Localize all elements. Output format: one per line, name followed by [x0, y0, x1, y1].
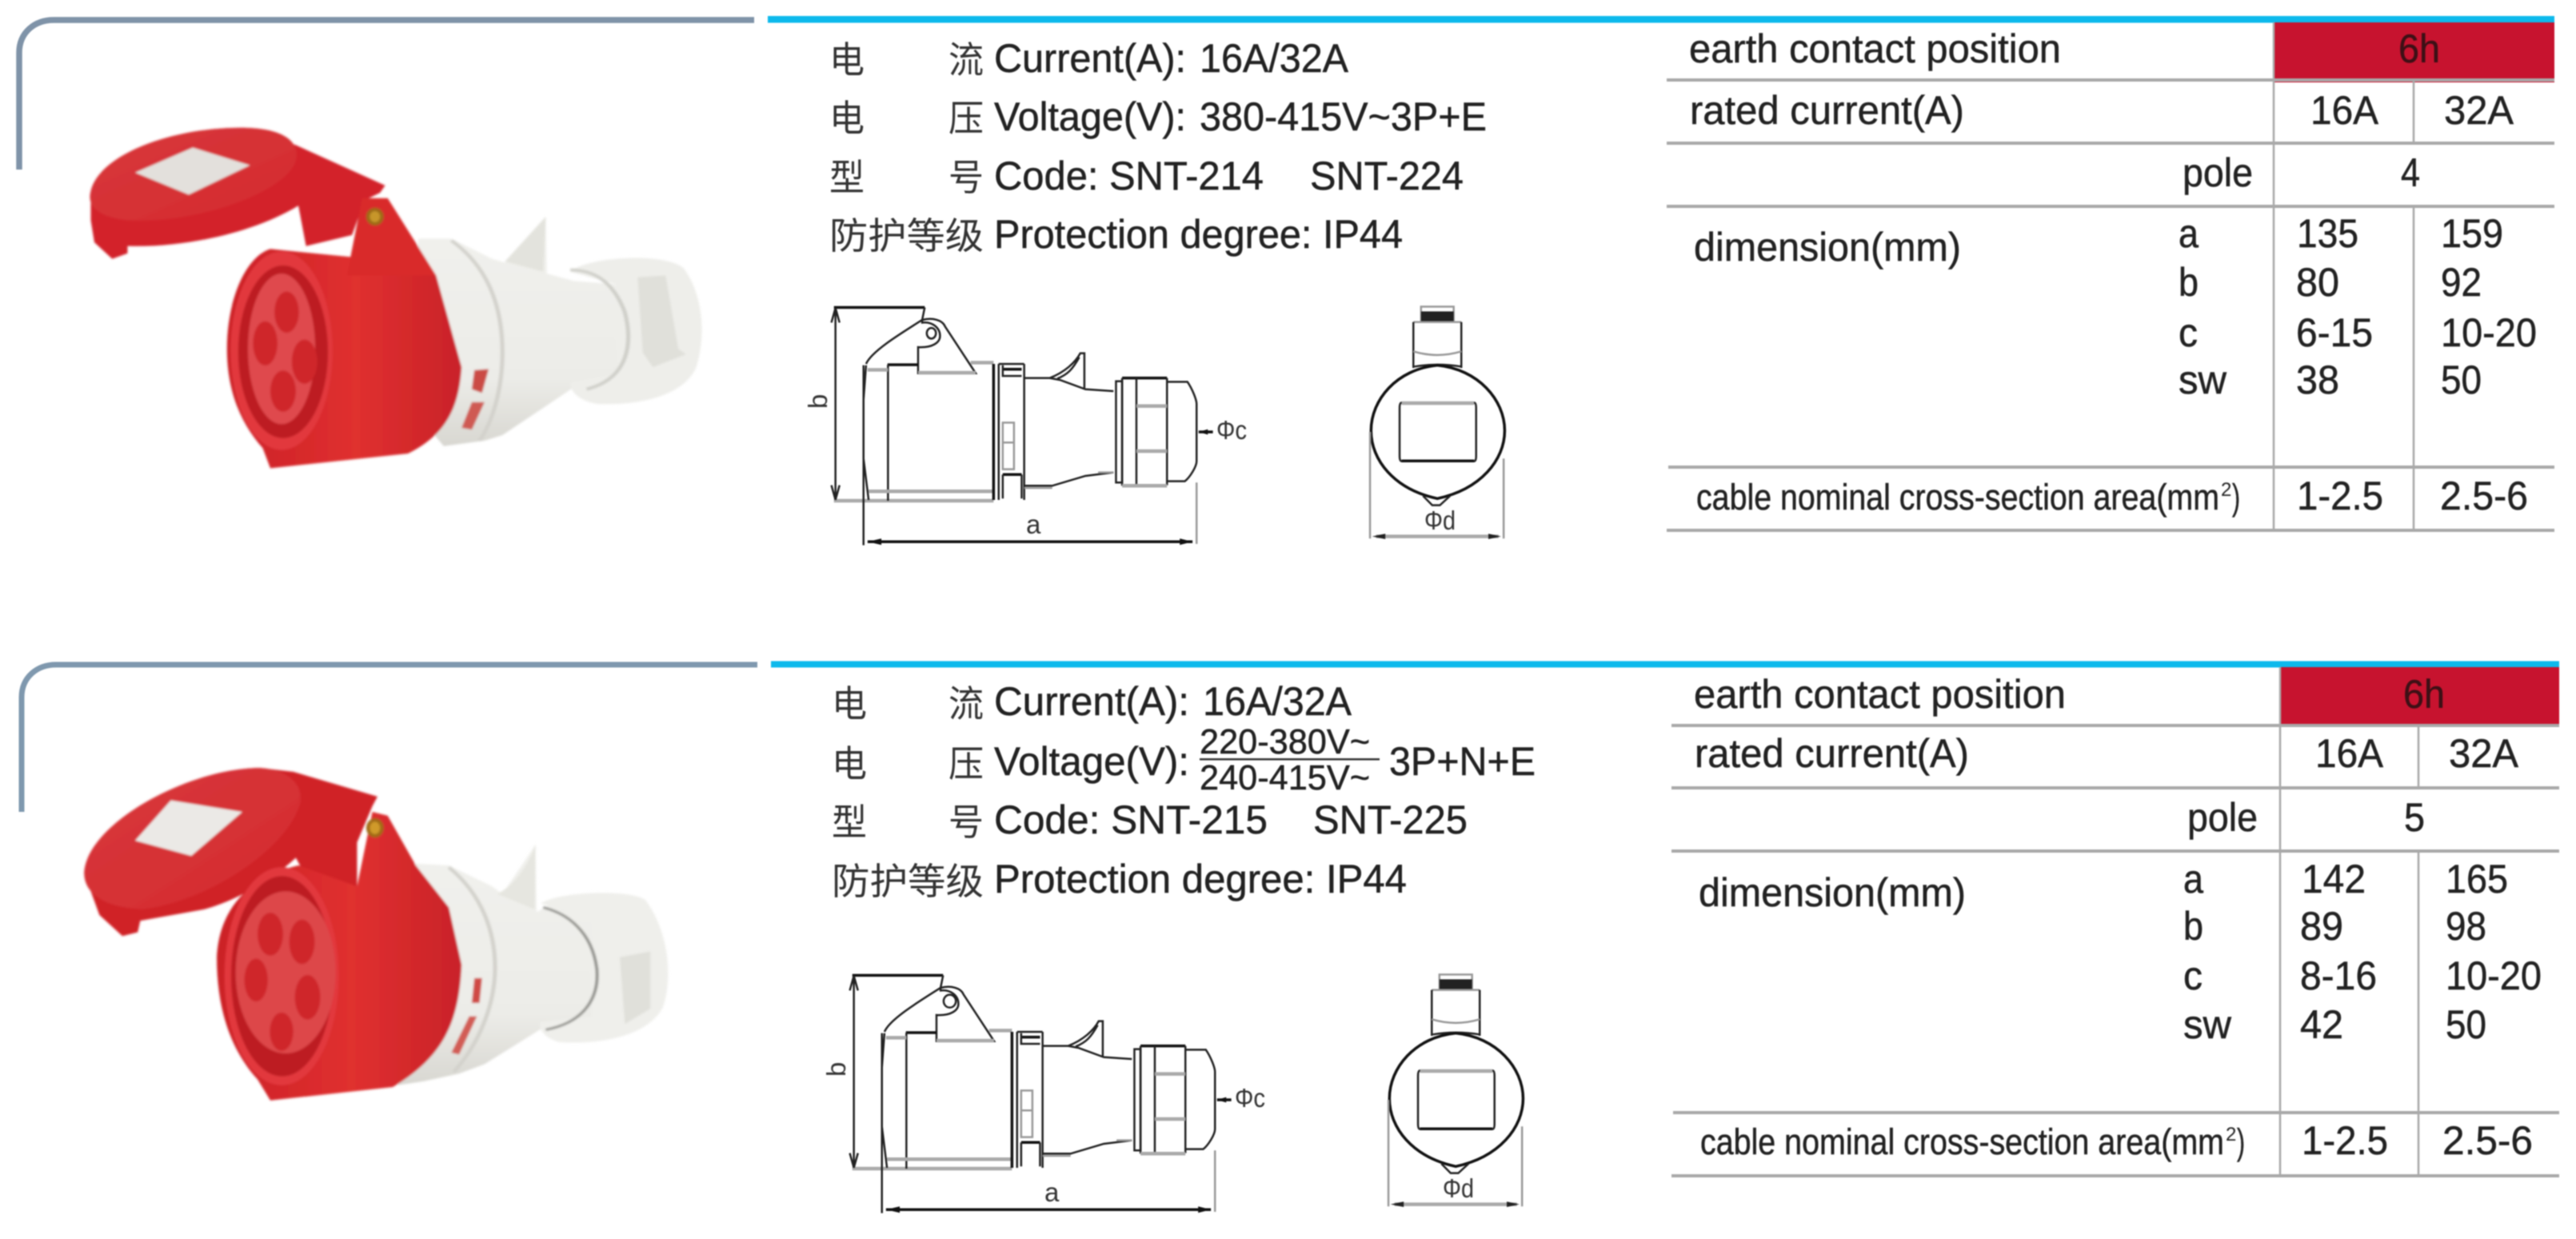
technical drawing: 5-pole side and front views	[821, 974, 1523, 1213]
specification table: 4-pole: 32A	[2444, 88, 2514, 133]
specification table: 4-pole: )	[2232, 477, 2240, 518]
specification text: 5-pole: 压	[949, 735, 984, 788]
specification text: 4-pole: Voltage(V):	[994, 94, 1186, 139]
specification table: 4-pole: rated current(A)	[1690, 88, 1964, 133]
specification table: 4-pole: pole	[2183, 150, 2253, 195]
specification text: 5-pole	[832, 675, 1536, 905]
specification table: 4-pole: 80	[2296, 260, 2339, 305]
specification table: 5-pole: 50	[2446, 1002, 2486, 1047]
specification table: 5-pole: b	[2183, 904, 2203, 949]
specification table: 4-pole: a	[2179, 211, 2199, 256]
specification table: 4-pole: sw	[2179, 358, 2227, 402]
specification table: 5-pole: c	[2183, 953, 2203, 998]
specification text: 5-pole: 电	[832, 735, 867, 788]
specification table: 4-pole: 2.5-6	[2440, 474, 2528, 518]
specification text: 5-pole: 240-415V~	[1200, 758, 1370, 797]
header rule: blue, second section	[771, 661, 2559, 667]
specification text: 5-pole: 流	[949, 675, 984, 728]
specification text: 4-pole: 电	[829, 90, 865, 142]
specification table: 4-pole: 10-20	[2441, 310, 2537, 355]
specification text: 4-pole	[829, 31, 1487, 260]
technical drawing: 5-pole side and front views: Φd	[1443, 1173, 1474, 1203]
specification table: 4-pole: b	[2179, 260, 2199, 305]
section 1: 4-pole connector	[19, 16, 2554, 546]
specification text: 5-pole: 型	[832, 793, 867, 846]
specification table: 5-pole: rated current(A)	[1695, 731, 1969, 776]
technical drawing: 5-pole side and front views: Φc	[1235, 1083, 1265, 1113]
specification table: 4-pole: 6-15	[2296, 310, 2373, 355]
specification text: 4-pole: 16A/32A	[1200, 36, 1349, 81]
specification text: 5-pole: 号	[949, 793, 984, 846]
specification table: 5-pole: 8-16	[2300, 953, 2377, 998]
specification table: 5-pole: 89	[2300, 904, 2343, 949]
technical drawing: 4-pole side and front views: Φd	[1424, 506, 1456, 535]
section 2: 5-pole connector	[22, 661, 2559, 1213]
specification text: 5-pole: Voltage(V):	[994, 739, 1189, 784]
specification table: 5-pole	[1671, 667, 2559, 1176]
specification text: 4-pole: 号	[949, 149, 984, 202]
header rule: blue	[768, 16, 2554, 22]
specification table: 4-pole: earth contact position	[1689, 26, 2061, 71]
technical drawing: 4-pole side and front views	[803, 306, 1504, 546]
specification table: 5-pole: 16A	[2315, 731, 2384, 776]
specification text: 4-pole: 防护等级	[829, 207, 984, 260]
specification table: 4-pole: 92	[2441, 260, 2482, 305]
specification table: 4-pole: 1-2.5	[2297, 474, 2383, 518]
specification table: 5-pole: )	[2237, 1121, 2245, 1162]
specification table: 5-pole: 10-20	[2446, 953, 2542, 998]
specification table: 5-pole: earth contact position	[1694, 672, 2066, 717]
specification text: 4-pole: 电	[829, 31, 865, 84]
specification table: 5-pole: 42	[2300, 1002, 2343, 1047]
specification table: 5-pole: 98	[2446, 904, 2486, 949]
specification table: 4-pole: 50	[2441, 358, 2482, 402]
specification table: 5-pole: 2	[2226, 1124, 2236, 1145]
specification table: 4-pole	[1667, 22, 2554, 530]
specification text: 5-pole: Code: SNT-215	[994, 797, 1268, 842]
technical drawing: 4-pole side and front views: a	[1026, 510, 1041, 539]
technical drawing: 5-pole side and front views: b	[821, 1062, 851, 1077]
technical drawing: 4-pole side and front views: Φc	[1216, 415, 1247, 445]
specification table: 5-pole: 5	[2404, 795, 2425, 840]
specification table: 4-pole: c	[2179, 310, 2198, 355]
specification table: 4-pole: 38	[2296, 358, 2339, 402]
specification table: 4-pole: 135	[2297, 211, 2358, 256]
specification text: 4-pole: 380-415V~3P+E	[1200, 94, 1487, 139]
specification text: 4-pole: Code: SNT-214	[994, 154, 1264, 198]
product photo: 5-pole red connector	[84, 768, 668, 1101]
technical drawing: 5-pole side and front views: a	[1044, 1177, 1060, 1207]
table highlight cell: 6h, second section	[2280, 667, 2559, 725]
specification table: 4-pole: 6h	[2398, 26, 2440, 71]
header rule: grey corner	[19, 20, 754, 170]
specification table: 5-pole: 1-2.5	[2302, 1118, 2388, 1163]
specification text: 5-pole: 220-380V~	[1200, 722, 1370, 761]
specification table: 5-pole: 142	[2302, 857, 2366, 901]
specification table: 4-pole: 4	[2401, 150, 2420, 195]
specification text: 5-pole: Current(A):	[994, 679, 1189, 724]
specification table: 5-pole: sw	[2183, 1002, 2232, 1047]
specification table: 5-pole: 2.5-6	[2442, 1118, 2533, 1163]
product photo: 4-pole red connector	[90, 128, 702, 468]
specification text: 5-pole: 防护等级	[832, 853, 984, 905]
table highlight cell: 6h	[2274, 22, 2554, 82]
specification text: 5-pole: SNT-225	[1313, 797, 1468, 842]
specification text: 5-pole: 16A/32A	[1203, 679, 1352, 724]
specification table: 5-pole: 32A	[2449, 731, 2519, 776]
specification table: 5-pole: dimension(mm)	[1699, 870, 1966, 915]
specification table: 5-pole: 6h	[2403, 672, 2445, 717]
specification table: 4-pole: dimension(mm)	[1694, 225, 1961, 270]
specification table: 5-pole: 165	[2446, 857, 2508, 901]
specification table: 5-pole: cable nominal cross-section area(mm	[1700, 1121, 2224, 1162]
technical drawing: 4-pole side and front views: b	[803, 394, 833, 409]
specification text: 5-pole: Protection degree: IP44	[994, 857, 1407, 901]
specification text: 4-pole: 型	[829, 149, 865, 202]
specification text: 4-pole: 压	[949, 90, 984, 142]
specification table: 4-pole: 2	[2221, 479, 2231, 501]
specification table: 4-pole: 159	[2441, 211, 2503, 256]
specification text: 4-pole: 流	[949, 31, 984, 84]
header rule: grey corner, second section	[22, 665, 757, 812]
specification table: 5-pole: a	[2183, 857, 2203, 901]
specification text: 4-pole: Protection degree: IP44	[994, 212, 1403, 257]
specification table: 4-pole: 16A	[2310, 88, 2379, 133]
specification text: 4-pole: SNT-224	[1310, 154, 1464, 198]
specification text: 5-pole: 电	[832, 675, 867, 728]
specification text: 5-pole: 3P+N+E	[1389, 739, 1536, 784]
specification text: 4-pole: Current(A):	[994, 36, 1186, 81]
specification table: 4-pole: cable nominal cross-section area(mm	[1696, 477, 2219, 518]
specification table: 5-pole: pole	[2187, 795, 2258, 840]
